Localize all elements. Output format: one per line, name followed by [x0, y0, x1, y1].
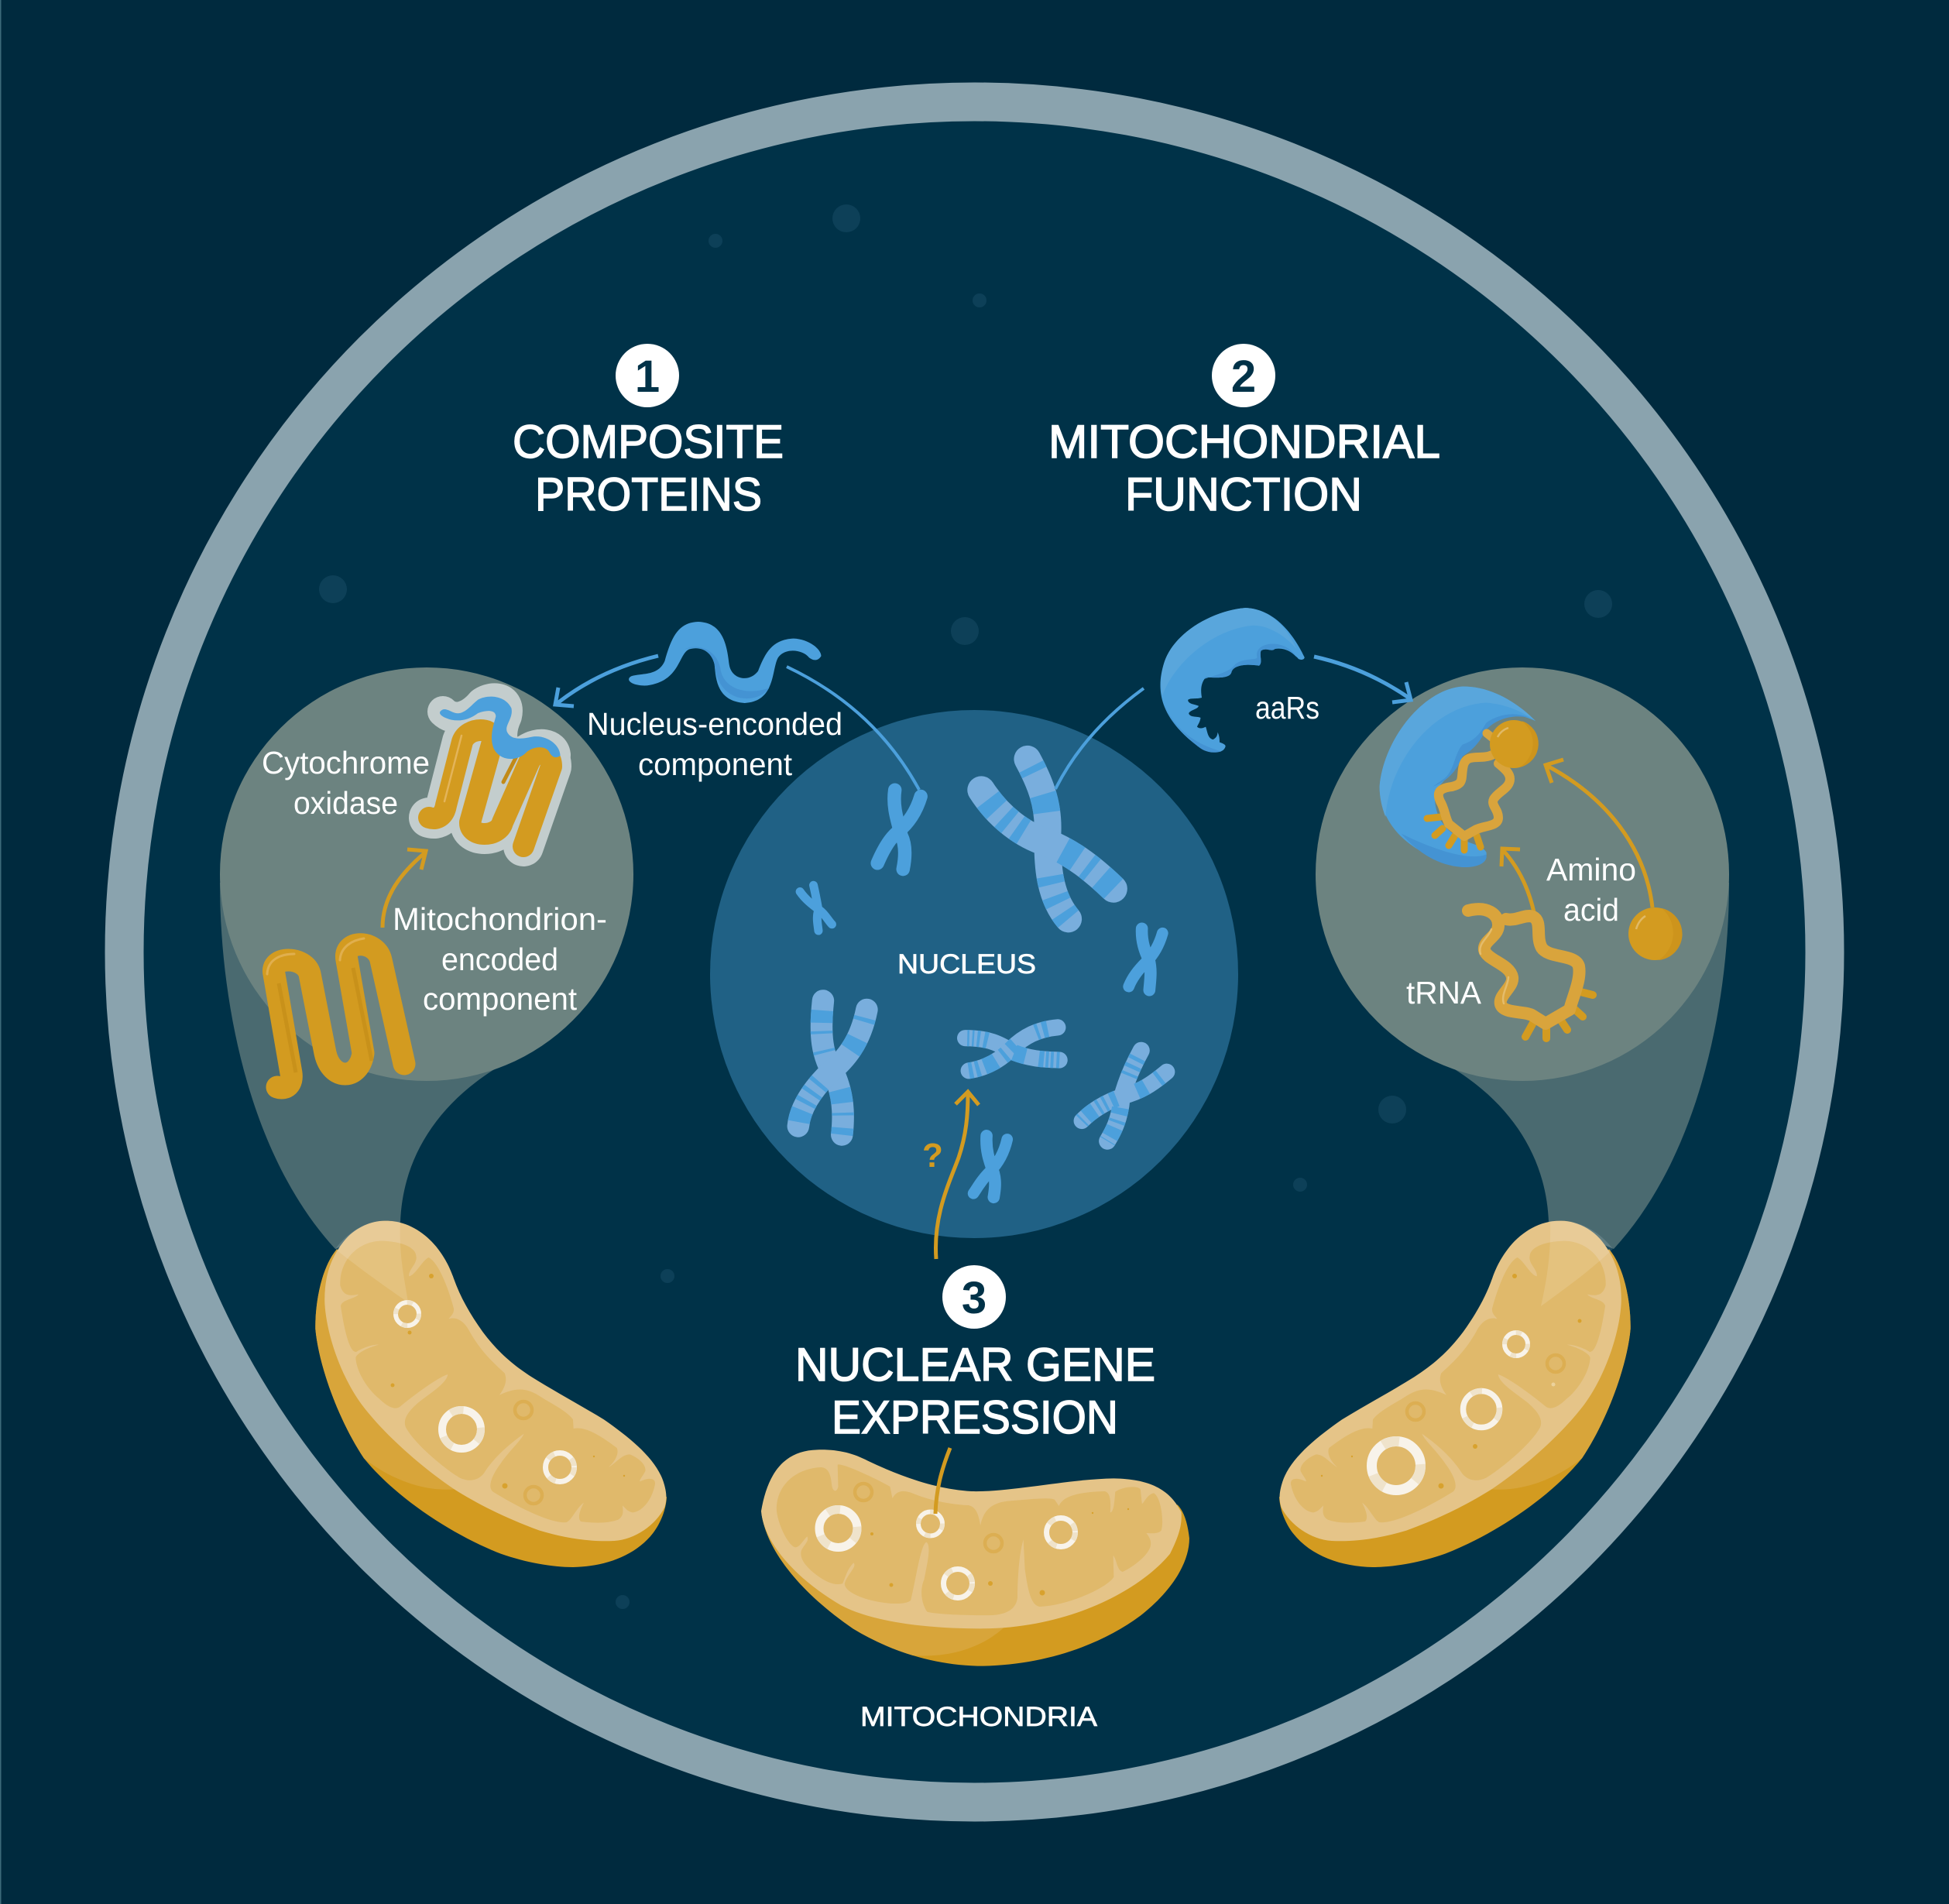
chromosome: center horizontal: [966, 1027, 1059, 1071]
oxidase halo: [429, 698, 555, 846]
background particles: [319, 204, 1612, 1609]
cell membrane ring: [124, 102, 1824, 1803]
label: cytochrome oxidase: oxidase: [293, 785, 398, 821]
heading: composite proteins: [513, 416, 784, 520]
chromosome: small bottom: [973, 1136, 1007, 1197]
mitochondrion: right: [1279, 1221, 1631, 1567]
badge 1: 1: [635, 352, 660, 402]
label: mitochondria: MITOCHONDRIA: [860, 1702, 1098, 1732]
heading: mitochondrial function: MITOCHONDRIAL: [1048, 416, 1440, 468]
label: mitochondrion-encoded component: Mitochondrion-: [393, 901, 607, 937]
label: nucleus-encoded component: component: [638, 746, 793, 782]
chromosome: large bottom left: [798, 1000, 866, 1134]
tRNA bound to aaRs: [1427, 733, 1510, 850]
label: tRNA: tRNA: [1406, 975, 1482, 1010]
arrow: chromosome to nucleus-encoded component: [787, 667, 919, 790]
right zoom bubble: [1316, 667, 1729, 1081]
aaRs enzyme: [1161, 608, 1305, 753]
arrow: amino acid to enzyme: [1546, 760, 1652, 907]
right magnification beam: [1453, 874, 1729, 1249]
mitochondrion: left: [315, 1221, 667, 1567]
heading: nuclear gene expression: [795, 1339, 1155, 1443]
label: amino acid: acid: [1563, 892, 1619, 928]
chromosome: lower right: [1082, 1051, 1167, 1141]
label: amino acid: [1546, 852, 1636, 928]
nucleus label: NUCLEUS: [897, 949, 1036, 979]
arrow: heading 3 line to mitochondrial vesicle: [935, 1448, 950, 1514]
chromosomes: [798, 759, 1167, 1197]
mitochondrion-encoded chain: [267, 938, 404, 1088]
badge 2: 2: [1231, 352, 1256, 402]
arrow: worm to cytochrome oxidase: [555, 656, 658, 706]
vesicle rings: [396, 1302, 575, 1504]
nucleus-encoded protein worm: [629, 622, 821, 703]
oxidase orange chain: [429, 730, 551, 846]
label: mitochondrion-encoded component: encoded: [441, 942, 558, 977]
chromosome: tiny left: [800, 885, 832, 931]
arrow: tRNA to enzyme: [1501, 849, 1534, 912]
beam overlap on right mitochondrion: [1541, 1221, 1613, 1306]
heading: mitochondrial function: [1048, 416, 1440, 520]
cytochrome oxidase complex: [429, 697, 561, 846]
heading: composite proteins: COMPOSITE: [513, 416, 784, 468]
left magnification beam: [220, 874, 496, 1249]
label: nucleus-encoded component: [587, 706, 842, 782]
label: cytochrome oxidase: [262, 745, 430, 821]
oxidase blue chain: [440, 697, 561, 759]
chromosome: large top right: [981, 759, 1113, 919]
chromosome: small right: [1129, 928, 1162, 990]
left zoom bubble: [220, 667, 633, 1081]
label: nucleus-encoded component: Nucleus-enconded: [587, 706, 842, 742]
vesicle rings: [819, 1484, 1075, 1598]
label: mitochondrion-encoded component: component: [423, 981, 578, 1017]
free tRNA: [1468, 909, 1593, 1038]
badge 3: 3: [962, 1273, 987, 1323]
label: cytochrome oxidase: Cytochrome: [262, 745, 430, 780]
badge 3: [942, 1265, 1006, 1329]
heading: mitochondrial function: FUNCTION: [1125, 468, 1362, 520]
heading: composite proteins: PROTEINS: [535, 468, 762, 520]
arrow: aaRs to right bubble: [1314, 657, 1411, 702]
arrow: chromosome to aaRs: [1055, 688, 1144, 789]
heading: nuclear gene expression: NUCLEAR GENE: [795, 1339, 1155, 1391]
beam overlap on left mitochondrion: [335, 1221, 408, 1302]
arrow: mitochondrion-encoded to oxidase: [383, 849, 426, 928]
chromosome: small upper: [877, 790, 921, 870]
badge 2: [1212, 344, 1275, 407]
arrow: mitochondrion to nuclear chromosome: [935, 1092, 979, 1259]
label: mitochondrion-encoded component: [393, 901, 607, 1017]
heading: nuclear gene expression: EXPRESSION: [832, 1391, 1118, 1443]
label: amino acid: Amino: [1546, 852, 1636, 887]
vesicle rings: [1372, 1333, 1564, 1490]
mitochondrion: center: [761, 1449, 1189, 1666]
free amino acid: [1628, 907, 1683, 960]
nucleus: [710, 710, 1238, 1238]
aaRs enzyme in bubble: [1380, 687, 1536, 867]
badge 1: [616, 344, 679, 407]
label: aaRs: aaRs: [1255, 690, 1319, 726]
question mark: ?: [922, 1137, 943, 1175]
amino acid bound to tRNA: [1490, 720, 1539, 768]
